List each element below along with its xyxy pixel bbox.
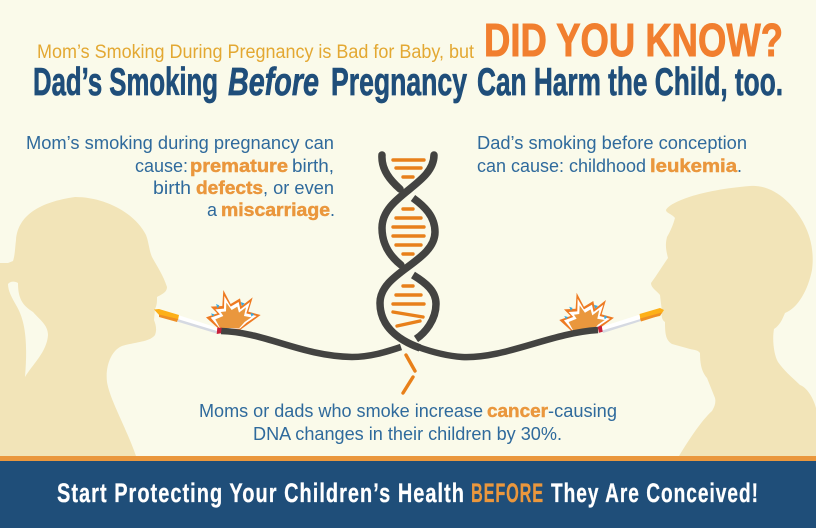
silhouette: father — [651, 186, 816, 456]
text block: mom's smoking effects: birth, — [292, 156, 334, 176]
right fuse — [418, 330, 598, 357]
footer slogan: BEFORE — [471, 478, 544, 508]
text block: mom's smoking effects: a — [207, 200, 218, 220]
DNA strands — [380, 155, 436, 348]
left fuse — [221, 331, 401, 357]
text block: mom's smoking effects: . — [330, 200, 335, 220]
footer slogan: Start Protecting Your Children’s Health — [57, 478, 465, 508]
main title — [33, 61, 783, 104]
footer banner — [0, 456, 816, 528]
DNA helix and fuses — [221, 155, 598, 393]
text block: dad's smoking effects: Dad’s smoking before conception — [477, 133, 747, 153]
icon: right explosion — [559, 293, 614, 333]
text block: dad's smoking effects: leukemia — [650, 156, 738, 176]
title intro line: Mom’s Smoking During Pregnancy is Bad for Baby, but — [37, 42, 475, 63]
text block: cancer-causing DNA changes: cancer — [487, 401, 548, 421]
main title: Before — [228, 61, 319, 104]
DNA rungs — [393, 160, 424, 393]
main title: Dad’s Smoking — [33, 61, 218, 104]
icon: left cigarette — [154, 309, 222, 334]
text block: cancer-causing DNA changes: Moms or dads who smoke increase — [199, 401, 483, 421]
text block: cancer-causing DNA changes: DNA changes in their children by 30%. — [253, 424, 562, 444]
text block: mom's smoking effects: cause: — [135, 156, 188, 176]
icon: left explosion — [206, 290, 261, 330]
text block: cancer-causing DNA changes: -causing — [548, 401, 617, 421]
icon: right cigarette — [598, 308, 664, 333]
text block: mom's smoking effects: miscarriage — [221, 200, 330, 220]
main title: Pregnancy — [331, 61, 467, 104]
silhouette: mother — [0, 197, 167, 456]
text block: mom's smoking effects: birth — [153, 178, 191, 198]
text block: mom's smoking effects: Mom’s smoking during pregnancy can — [26, 133, 334, 153]
text block: mom's smoking effects: defects — [196, 178, 263, 198]
text block: mom's smoking effects — [26, 133, 335, 220]
text block: mom's smoking effects: , or even — [263, 178, 334, 198]
text block: mom's smoking effects: premature — [190, 156, 288, 176]
text block: dad's smoking effects: . — [737, 156, 742, 176]
text block: dad's smoking effects: can cause: childhood — [477, 156, 646, 176]
text block: dad's smoking effects — [477, 133, 747, 176]
text block: cancer-causing DNA changes — [199, 401, 617, 444]
